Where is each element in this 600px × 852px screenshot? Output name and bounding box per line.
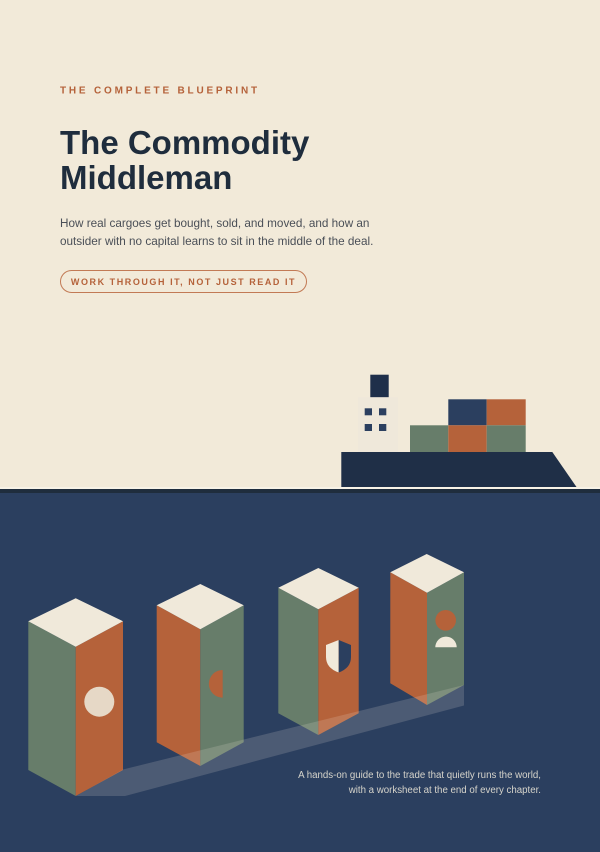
sea panel	[0, 487, 600, 852]
subtitle: outsider with no capital learns to sit in the middle of the deal.	[60, 235, 373, 248]
block 1 with circle icon	[28, 598, 123, 796]
icon: half circle	[209, 670, 223, 698]
title: The Commodity	[60, 124, 309, 160]
eyebrow: THE COMPLETE BLUEPRINT	[60, 85, 260, 96]
title	[60, 124, 310, 196]
subtitle: How real cargoes get bought, sold, and moved, and how an	[60, 217, 369, 230]
icon: person	[435, 610, 457, 647]
block 4 with person icon	[390, 554, 464, 705]
icon: shield	[326, 640, 351, 672]
containers	[410, 399, 526, 452]
block 2 with half circle icon	[157, 584, 244, 766]
caption: A hands-on guide to the trade that quietly runs the world,	[298, 770, 541, 781]
icon: circle	[84, 687, 114, 717]
caption: with a worksheet at the end of every chapter.	[349, 784, 541, 796]
ship	[341, 375, 576, 487]
caption	[298, 770, 541, 796]
ship funnel	[370, 375, 389, 397]
ship superstructure	[358, 397, 398, 452]
pill label	[60, 270, 307, 293]
block 3 with shield icon	[278, 568, 359, 735]
translucent floor beam	[76, 685, 464, 796]
subtitle	[60, 217, 373, 248]
title: Middleman	[60, 159, 232, 196]
ship hull	[341, 452, 576, 487]
pill label: WORK THROUGH IT, NOT JUST READ IT	[71, 277, 296, 287]
